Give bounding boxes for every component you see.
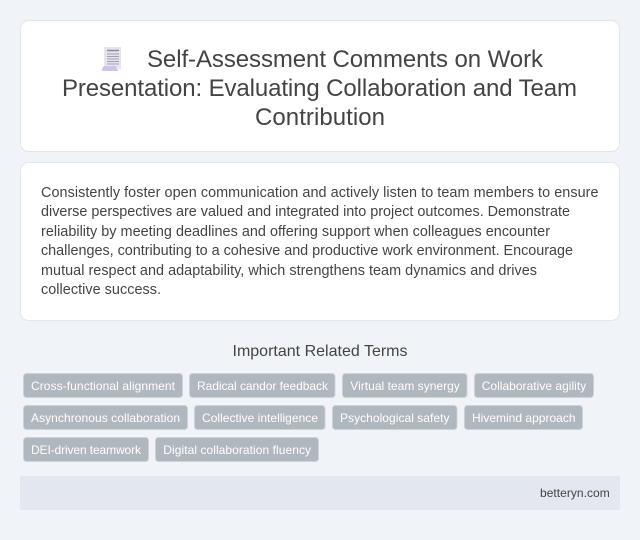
tag: Hivemind approach — [472, 411, 576, 425]
tag — [332, 406, 457, 430]
summary text: collective success. — [41, 282, 161, 298]
summary text: mutual respect and adaptability, which strengthens team dynamics and drives — [41, 263, 537, 279]
title: Self-Assessment Comments on Work — [147, 46, 544, 73]
summary text: diverse perspectives are valued and integrated into project outcomes. Demonstrate — [41, 204, 570, 220]
tag: Digital collaboration fluency — [163, 443, 311, 457]
title: Presentation: Evaluating Collaboration and Team — [62, 75, 577, 102]
tag — [24, 406, 188, 430]
icon: document scroll — [102, 47, 121, 71]
tag — [474, 374, 594, 398]
tag — [342, 374, 467, 398]
footer source text: betteryn.com — [540, 486, 610, 500]
tag: Cross-functional alignment — [31, 379, 176, 393]
tag: Collaborative agility — [482, 379, 586, 393]
tag: DEI-driven teamwork — [31, 443, 142, 457]
panel: title card — [20, 20, 620, 152]
summary text: challenges, contributing to a cohesive and productive work environment. Encourage — [41, 243, 573, 259]
summary text: reliability by meeting deadlines and offering support when colleagues encounter — [41, 224, 550, 240]
tag — [156, 438, 318, 462]
tag: Collective intelligence — [202, 411, 318, 425]
tag: Psychological safety — [340, 411, 450, 425]
tag — [24, 438, 148, 462]
tag: Radical candor feedback — [197, 379, 329, 393]
tag — [194, 406, 325, 430]
tag — [190, 374, 335, 398]
heading: related terms: Important Related Terms — [232, 343, 408, 360]
tag list — [24, 374, 594, 462]
panel: summary card — [20, 162, 620, 320]
title — [62, 46, 577, 131]
footer bar — [20, 476, 620, 510]
title: Contribution — [255, 104, 385, 131]
tag: Asynchronous collaboration — [31, 411, 180, 425]
tag: Virtual team synergy — [350, 379, 460, 393]
summary text: Consistently foster open communication and actively listen to team members to ensure — [41, 185, 598, 201]
summary text — [41, 185, 598, 298]
tag — [24, 374, 182, 398]
tag — [464, 406, 582, 430]
